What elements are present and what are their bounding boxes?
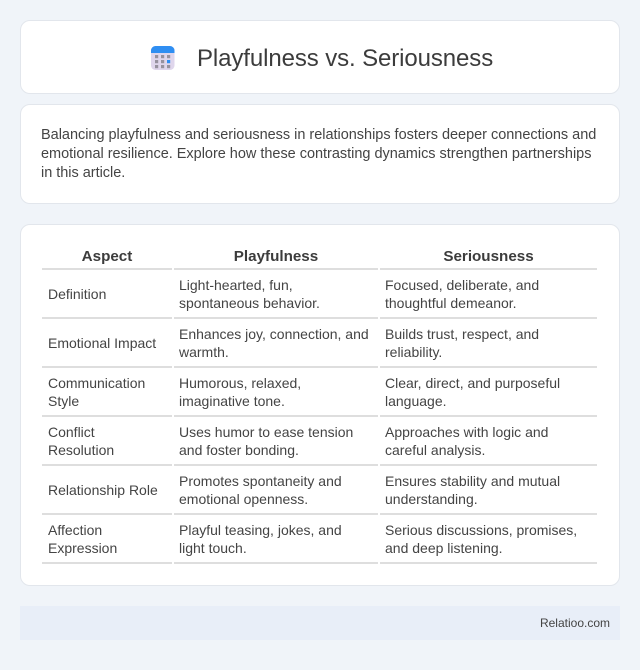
row: Emotional Impact: Builds trust, respect, and [385,326,539,342]
row: Emotional Impact: warmth. [179,344,229,360]
table header: Playfulness [234,248,318,265]
title: Playfulness vs. Seriousness [197,45,493,72]
table header [42,248,597,270]
row: Definition: spontaneous behavior. [179,295,320,311]
row: Conflict Resolution: Conflict [48,424,95,440]
table header: Seriousness [443,248,534,265]
row: Communication Style: imaginative tone. [179,393,285,409]
row: Relationship Role: emotional openness. [179,491,308,507]
panel: introduction [20,104,620,204]
row: Conflict Resolution: careful analysis. [385,442,485,458]
panel: header [20,20,620,94]
icon: calendar [151,46,174,70]
row: Communication Style: Humorous, relaxed, [179,375,301,391]
row: Relationship Role: Relationship Role [48,482,158,498]
row: Affection Expression: Affection [48,522,102,538]
panel: comparison table [20,224,620,586]
row: Conflict Resolution: Resolution [48,442,114,458]
row: Affection Expression: Expression [48,540,117,556]
row: Communication Style [42,375,597,417]
row: Relationship Role [42,473,597,515]
row: Emotional Impact: reliability. [385,344,442,360]
table header: Aspect [82,248,132,265]
row: Affection Expression: Playful teasing, jokes, and [179,522,342,538]
intro text: Balancing playfulness and seriousness in relationships fosters deeper connections and [41,127,596,143]
row: Definition: Definition [48,286,106,302]
row: Definition: Light-hearted, fun, [179,277,293,293]
row: Affection Expression: and deep listening. [385,540,503,556]
footer bar [20,606,620,640]
row: Relationship Role: Promotes spontaneity and [179,473,342,489]
row: Affection Expression: light touch. [179,540,247,556]
row: Communication Style: Communication [48,375,145,391]
row: Emotional Impact: Enhances joy, connection, and [179,326,369,342]
row: Communication Style: Style [48,393,79,409]
row: Definition: Focused, deliberate, and [385,277,539,293]
row: Conflict Resolution: Uses humor to ease tension [179,424,353,440]
row: Affection Expression: Serious discussions, promises, [385,522,577,538]
row: Definition: thoughtful demeanor. [385,295,517,311]
row: Relationship Role: Ensures stability and mutual [385,473,560,489]
row: Conflict Resolution: and foster bonding. [179,442,299,458]
footer brand text: Relatioo.com [540,616,610,630]
intro text: in this article. [41,165,125,181]
row: Communication Style: language. [385,393,447,409]
intro text: emotional resilience. Explore how these contrasting dynamics strengthen partnerships [41,146,591,162]
row: Affection Expression [42,522,597,564]
row: Definition [42,277,597,319]
row: Emotional Impact: Emotional Impact [48,335,156,351]
row: Conflict Resolution [42,424,597,466]
row: Relationship Role: understanding. [385,491,478,507]
row: Communication Style: Clear, direct, and purposeful [385,375,560,391]
intro text [41,127,596,181]
row: Conflict Resolution: Approaches with logic and [385,424,548,440]
row: Emotional Impact [42,326,597,368]
